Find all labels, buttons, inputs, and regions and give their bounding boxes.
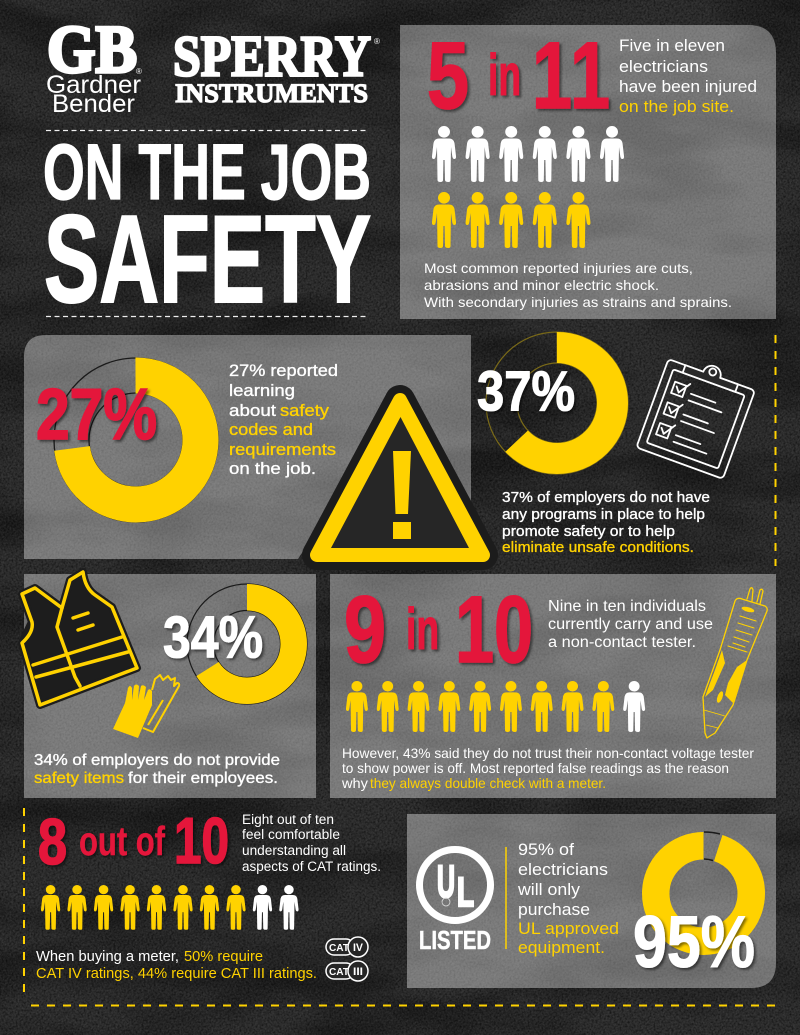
text: 34% of employers: safety items xyxy=(34,770,124,787)
text: 27% reported learning: codes and xyxy=(229,421,313,439)
icon: UL listed mark: LISTED xyxy=(419,925,491,955)
text: 27% reported learning: about xyxy=(229,402,276,420)
text: common injuries: abrasions and minor electric shock. xyxy=(424,277,659,293)
title: SAFETY xyxy=(44,191,371,329)
logo: Sperry Instruments: SPERRY xyxy=(173,24,371,88)
text: five in eleven: electricians xyxy=(619,58,708,76)
text: nine in ten: a non-contact tester. xyxy=(548,634,696,651)
stat: 9 in 10: 10 xyxy=(455,577,533,683)
text: 27% reported learning: safety xyxy=(280,402,330,420)
panel: 34 percent xyxy=(22,572,307,787)
logo: Gardner Bender: GB xyxy=(47,11,137,87)
stat: 8 out of 10: 8 xyxy=(38,805,67,878)
icon: UL listed mark xyxy=(419,850,491,955)
text: 37% of employers: promote safety or to help xyxy=(502,523,675,540)
stat: 8 out of 10: out of xyxy=(79,818,165,864)
title: ON THE JOB xyxy=(43,127,371,216)
logo: Sperry Instruments: ® xyxy=(374,37,380,46)
text: nine in ten: currently carry and use xyxy=(548,616,713,633)
icon: CAT IV badge xyxy=(326,937,368,957)
stat: 5 in 11: 1 xyxy=(532,23,572,129)
logo: Sperry Instruments: INSTRUMENTS xyxy=(175,79,368,108)
pictogram row: nine yellow one white xyxy=(346,681,645,732)
stat: 8 out of 10: 10 xyxy=(174,804,229,877)
text: 34% of employers: for their employees. xyxy=(128,770,278,787)
text: buying a meter: 50% require xyxy=(184,948,263,965)
text: buying a meter: CAT IV ratings, 44% require CAT III ratings. xyxy=(36,965,317,982)
logo: Gardner Bender: Gardner xyxy=(46,71,141,99)
icon: gloves xyxy=(113,675,179,738)
icon: CAT IV badge: CAT xyxy=(329,943,349,954)
text: voltage tester trust xyxy=(341,745,754,791)
text: nine in ten: Nine in ten individuals xyxy=(548,598,706,615)
donut chart: 27% xyxy=(54,358,218,522)
panel: 27 percent xyxy=(36,358,338,522)
panel: 95 percent UL xyxy=(419,832,755,983)
text: eight out of ten: Eight out of ten xyxy=(242,812,334,827)
stat: 5 in 11: 1 xyxy=(570,23,610,129)
text: buying a meter xyxy=(36,948,317,982)
text: 27% reported learning: requirements xyxy=(229,441,336,459)
text: five in eleven xyxy=(619,37,757,116)
text: 27% reported learning: on the job. xyxy=(229,460,316,478)
donut chart: 95% xyxy=(656,832,751,941)
icon: clipboard checklist xyxy=(636,351,758,479)
icon: warning triangle xyxy=(317,400,483,555)
panel: 9 in 10 xyxy=(341,577,767,791)
stat: 5 in 11: in xyxy=(488,43,521,108)
stat: 37%: 37% xyxy=(477,360,575,424)
logo: Gardner Bender: ® xyxy=(136,67,142,76)
stat: 95%: 95% xyxy=(633,902,755,983)
text: 37% of employers: any programs in place to help xyxy=(502,506,705,523)
stat: 9 in 10: 9 xyxy=(344,577,386,683)
text: nine in ten xyxy=(548,598,713,651)
text: 27% reported learning: 27% reported xyxy=(229,362,338,380)
logo: Gardner Bender: Bender xyxy=(52,90,135,118)
text: eight out of ten: aspects of CAT ratings. xyxy=(242,859,381,874)
text: 95% of electricians: purchase xyxy=(518,901,590,919)
text: 95% of electricians: will only xyxy=(517,881,581,899)
text: 34% of employers xyxy=(34,752,280,787)
donut chart: 34% xyxy=(187,584,307,704)
text: 95% of electricians: UL approved xyxy=(518,920,619,938)
text: common injuries: With secondary injuries as strains and sprains. xyxy=(424,294,732,310)
icon: UL listed mark: U xyxy=(437,856,455,907)
text: common injuries xyxy=(424,260,732,310)
donut chart: 37% xyxy=(486,332,628,474)
text: voltage tester trust: they always double check with a meter. xyxy=(370,775,606,791)
text: five in eleven: have been injured xyxy=(619,78,757,96)
text: voltage tester trust: However, 43% said they do not trust their non-contact voltage tester xyxy=(342,745,754,761)
text: 37% of employers: 37% of employers do not have xyxy=(502,489,710,506)
text: 37% of employers xyxy=(502,489,710,556)
pictogram row: five yellow people xyxy=(432,192,590,248)
text: 27% reported learning: learning xyxy=(229,382,295,400)
text: common injuries: Most common reported injuries are cuts, xyxy=(424,260,693,276)
pictogram row: six white people xyxy=(432,126,624,182)
text: 95% of electricians: electricians xyxy=(518,861,608,879)
text: 34% of employers: 34% of employers do not provide xyxy=(34,752,280,769)
text: eight out of ten: feel comfortable xyxy=(242,827,340,842)
text: 37% of employers: eliminate unsafe conditions. xyxy=(502,539,694,556)
text: five in eleven: Five in eleven xyxy=(619,37,725,55)
title xyxy=(43,127,371,329)
text: 95% of electricians: 95% of xyxy=(518,841,574,859)
stat: 27%: 27% xyxy=(36,375,157,455)
icon: CAT III badge: CAT xyxy=(329,967,349,978)
stat: 9 in 10 xyxy=(344,577,533,683)
icon: UL listed mark: L xyxy=(457,869,474,915)
icon: non-contact tester xyxy=(703,588,767,738)
logo: Gardner Bender xyxy=(46,11,142,118)
icon: CAT IV badge: IV xyxy=(353,942,364,954)
text: voltage tester trust: to show power is off. Most reported false readings as the reason xyxy=(342,760,729,776)
icon: safety vest xyxy=(22,572,137,705)
stat: 5 in 11 xyxy=(427,23,610,129)
text: five in eleven: on the job site. xyxy=(619,98,734,116)
stat: 5 in 11: 5 xyxy=(427,23,469,129)
pictogram row: eight yellow two white xyxy=(41,885,299,930)
text: voltage tester trust: why xyxy=(341,775,368,791)
text: 27% reported learning xyxy=(229,362,338,478)
panel: 5 in 11 xyxy=(424,23,757,310)
icon: CAT III badge: III xyxy=(353,966,363,978)
icon: CAT III badge xyxy=(326,961,368,981)
stat: 8 out of 10 xyxy=(38,804,229,878)
text: buying a meter: When buying a meter, xyxy=(36,948,179,965)
panel: 37 percent xyxy=(477,332,758,556)
stat: 34%: 34% xyxy=(163,604,263,670)
text: eight out of ten xyxy=(242,812,381,874)
section: 8 out of 10 xyxy=(36,804,381,982)
stat: 9 in 10: in xyxy=(406,597,439,662)
text: eight out of ten: understanding all xyxy=(242,843,346,858)
text: 95% of electricians: equipment. xyxy=(518,939,605,957)
text: 95% of electricians xyxy=(517,841,619,957)
